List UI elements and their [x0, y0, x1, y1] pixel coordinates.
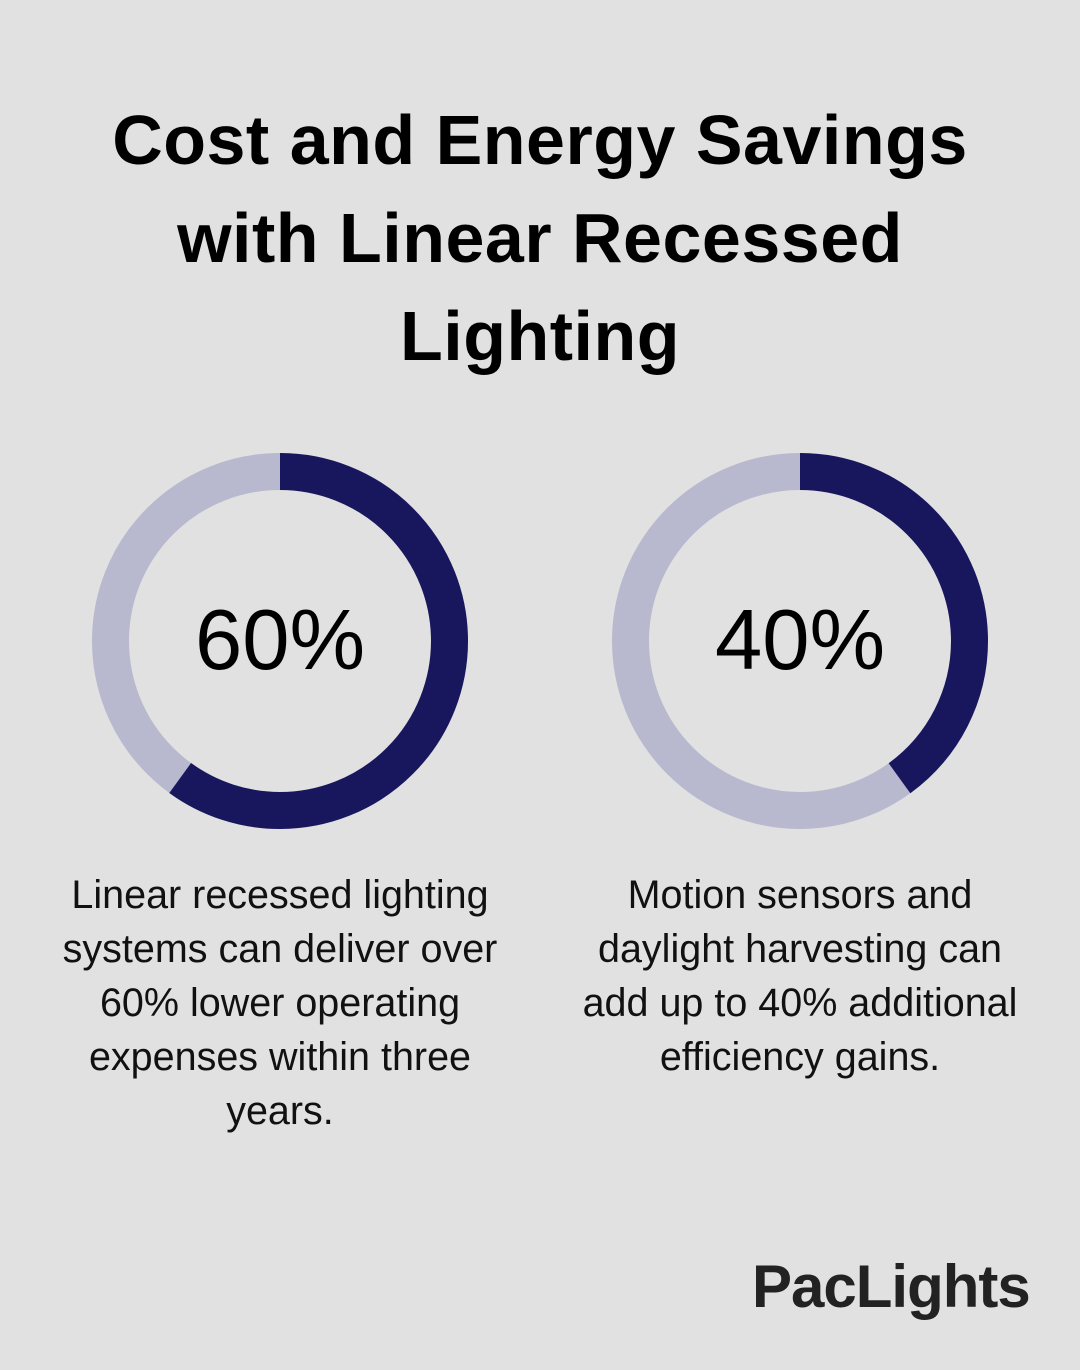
text: 40% description	[583, 873, 1017, 1079]
title: Cost and Energy Savings	[112, 101, 968, 179]
logo: PacLights	[752, 1253, 1030, 1320]
title: Lighting	[400, 297, 680, 375]
text: 60% description: systems can deliver over	[63, 927, 497, 971]
text: 60% description	[63, 873, 497, 1133]
text: 60% description: 60% lower operating	[100, 981, 460, 1025]
text: 60% description: Linear recessed lighting	[71, 873, 489, 917]
title: with Linear Recessed	[177, 199, 903, 277]
text: 40% description: add up to 40% additional	[583, 981, 1017, 1025]
donut: 60%: 60%	[195, 593, 365, 688]
donut: 60%	[110, 472, 450, 810]
text: 60% description: expenses within three	[89, 1035, 471, 1079]
donut: 40%: 40%	[715, 593, 885, 688]
text: 40% description: Motion sensors and	[628, 873, 972, 917]
text: 40% description: efficiency gains.	[660, 1035, 940, 1079]
title	[112, 101, 968, 375]
text: 40% description: daylight harvesting can	[598, 927, 1002, 971]
donut: 40%	[630, 472, 970, 810]
text: 60% description: years.	[226, 1089, 334, 1133]
